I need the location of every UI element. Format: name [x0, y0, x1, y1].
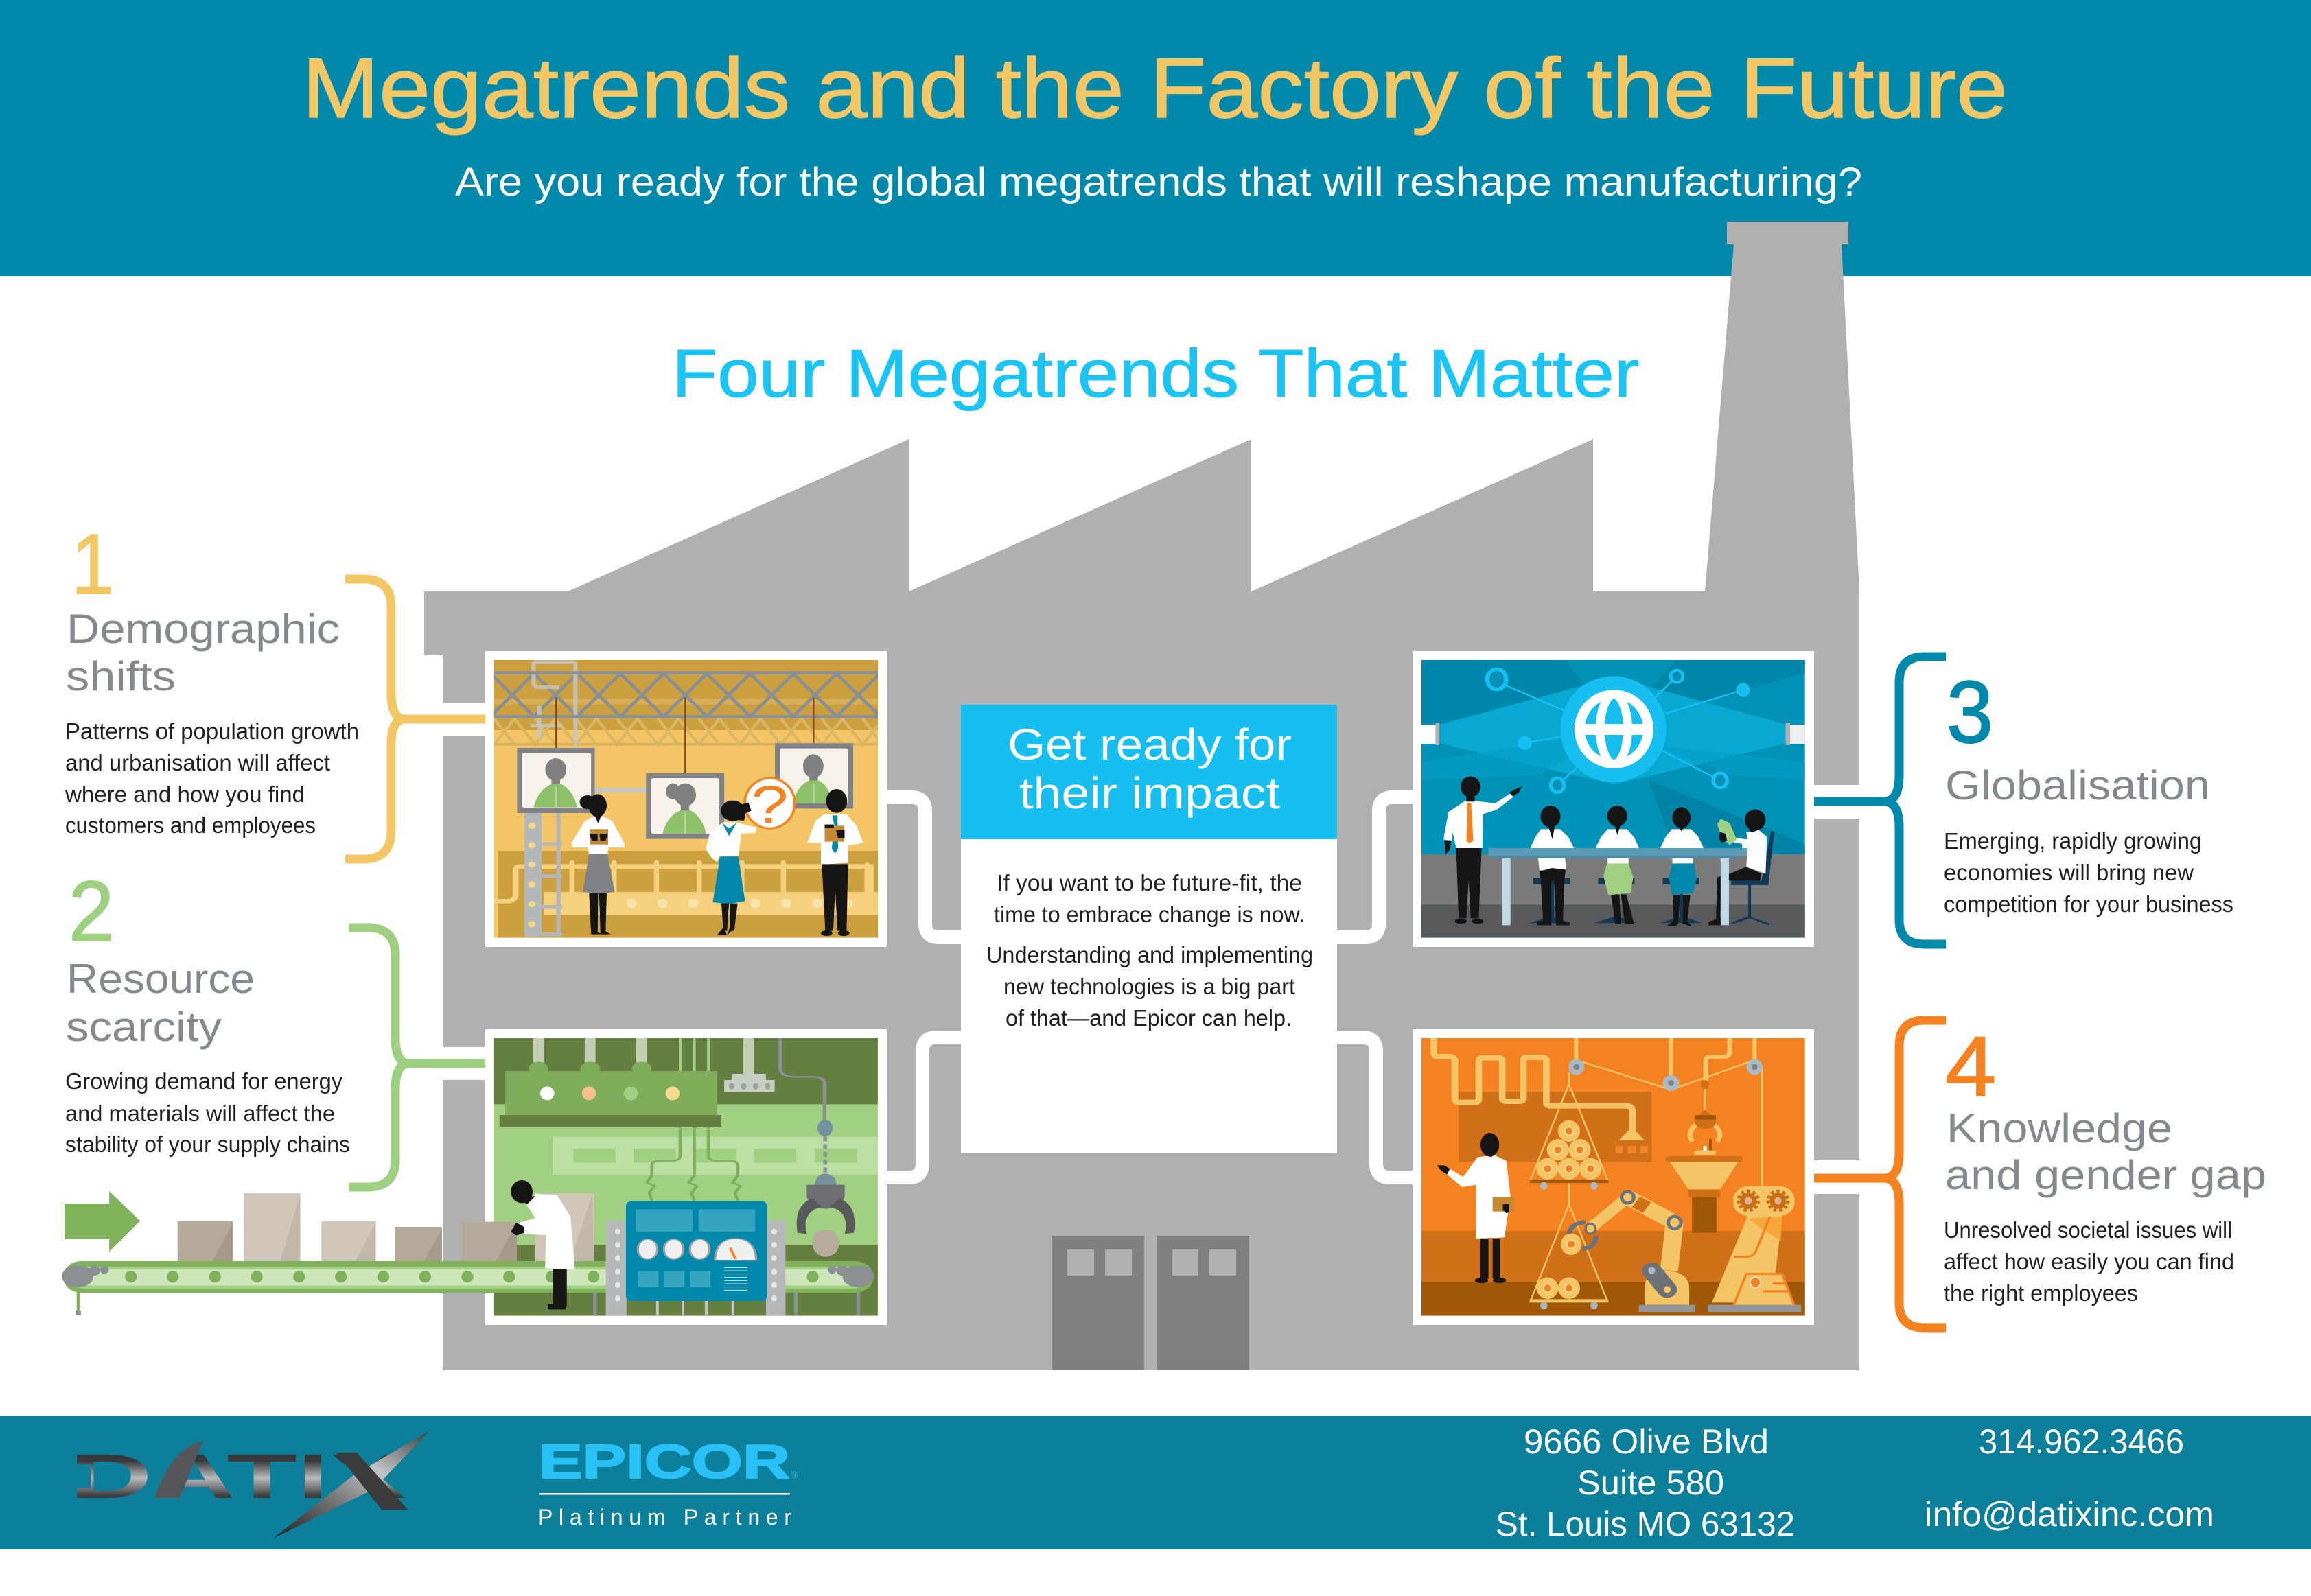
heading demographic shifts: [66, 606, 340, 699]
meeting table: [1489, 848, 1747, 925]
heading knowledge and gender gap: [1945, 1105, 2266, 1198]
body text: and urbanisation will affect: [65, 750, 330, 775]
hood and indicator squares: [1616, 1130, 1648, 1153]
overhead cables: [1569, 1038, 1762, 1204]
robot arm: [1561, 1192, 1695, 1312]
box heading: [1008, 720, 1292, 818]
logo: Epicor: EPICOR: [539, 1435, 790, 1488]
bracket 4: [1814, 1020, 1946, 1328]
wires with lightning: [647, 1127, 741, 1201]
image frame 4: [1413, 1029, 1814, 1325]
box body text: [986, 870, 1313, 1031]
heading resource scarcity: Resource: [67, 956, 255, 1002]
person: pointing scientist: [1437, 1133, 1514, 1283]
pulleys: [1568, 1059, 1763, 1091]
screen 1: [517, 748, 595, 813]
light panel: [553, 1137, 878, 1175]
gear robot: [1708, 1186, 1801, 1312]
panel: trend 2 resource text: [65, 865, 350, 1157]
screen 2: [646, 773, 724, 839]
network nodes: [1487, 669, 1749, 793]
number 2: 2: [69, 865, 114, 959]
image frame 2: [485, 1029, 887, 1325]
address: 9666 Olive Blvd: [1524, 1422, 1769, 1461]
box body text: If you want to be future-fit, the: [997, 870, 1302, 895]
panel: trend 1 demographic text: [65, 517, 359, 838]
person: seated centre: [1594, 806, 1639, 924]
contact details: info@datixinc.com: [1925, 1495, 2214, 1534]
body text: Growing demand for energy: [65, 1068, 342, 1094]
contact details: 314.962.3466: [1979, 1422, 2184, 1461]
heading resource scarcity: [66, 956, 255, 1050]
projectors: [1421, 723, 1805, 745]
logo: DATIX: [69, 1431, 430, 1538]
address: Suite 580: [1577, 1464, 1724, 1502]
illustration: globalisation meeting: [1421, 660, 1805, 938]
factory doors: [1052, 1236, 1249, 1370]
person: seated right: [1660, 807, 1704, 927]
factory silhouette: [424, 222, 1859, 1370]
body text: Emerging, rapidly growing: [1944, 828, 2202, 854]
lower roller rack: [1530, 1204, 1608, 1309]
heading globalisation: Globalisation: [1945, 762, 2210, 808]
subtitle: Are you ready for the global megatrends that will reshape manufacturing?: [455, 160, 1862, 204]
boxes: [178, 1193, 594, 1261]
body text: customers and employees: [65, 812, 316, 838]
person: seated with book: [1708, 810, 1774, 925]
logo: Epicor: ®: [791, 1469, 798, 1480]
body text: Patterns of population growth: [65, 718, 359, 744]
bracket 2: [349, 928, 485, 1187]
body text: affect how easily you can find: [1944, 1249, 2234, 1274]
hanging machine: [500, 1071, 721, 1127]
section heading: Four Megatrends That Matter: [672, 336, 1639, 411]
body text: the right employees: [1944, 1280, 2138, 1306]
panel: trend 3 globalisation text: [1944, 664, 2233, 917]
box heading: Get ready for: [1008, 720, 1292, 769]
heading knowledge and gender gap: and gender gap: [1945, 1152, 2266, 1198]
body text: [65, 1068, 350, 1157]
body text: stability of your supply chains: [65, 1131, 350, 1157]
box heading: their impact: [1019, 768, 1280, 818]
nozzle box: [724, 1074, 775, 1092]
upper roller rack: [1530, 1084, 1608, 1190]
white connector pipes: [887, 797, 1413, 1177]
illustration: machine room: [494, 1038, 878, 1316]
body text: competition for your business: [1944, 891, 2233, 917]
illustration: robotics and knowledge: [1421, 1038, 1805, 1316]
funnel machine: [1666, 1110, 1743, 1233]
group: conveyor section: [63, 1180, 874, 1316]
arrow: [65, 1191, 140, 1252]
number 3: 3: [1947, 664, 1993, 762]
person: presenter: [1443, 777, 1522, 924]
body text: Unresolved societal issues will: [1944, 1217, 2232, 1243]
address: [1496, 1422, 1795, 1543]
control panel: [606, 1201, 785, 1316]
panel: get ready box: [961, 705, 1337, 1153]
body text: economies will bring new: [1944, 860, 2194, 885]
robotic claw: [780, 1038, 855, 1257]
box body text: new technologies is a big part: [1003, 974, 1295, 999]
support legs: [595, 1293, 858, 1315]
panel: trend 4 knowledge text: [1944, 1020, 2266, 1306]
header band: [0, 0, 2311, 276]
contact details: [1925, 1422, 2214, 1534]
yellow pipes: [1434, 1038, 1632, 1132]
number 4: 4: [1945, 1020, 1996, 1114]
bracket 3: [1814, 657, 1946, 944]
person: woman with question: [706, 774, 795, 935]
body text: [1944, 828, 2233, 917]
body text: [65, 718, 359, 838]
logo: DATIX: DATIX: [69, 1442, 406, 1512]
logo: Epicor: [538, 1435, 798, 1529]
person: scientist: [511, 1180, 575, 1309]
address: St. Louis MO 63132: [1496, 1505, 1795, 1543]
body text: [1944, 1217, 2234, 1306]
person: seated left: [1530, 806, 1574, 925]
person: man with tablet: [807, 789, 863, 936]
heading demographic shifts: Demographic: [67, 606, 340, 652]
heading resource scarcity: scarcity: [66, 1004, 222, 1050]
title: Megatrends and the Factory of the Future: [302, 41, 2008, 136]
number 1: 1: [71, 517, 114, 612]
body text: and materials will affect the: [65, 1101, 335, 1126]
conveyor belt: [63, 1261, 874, 1315]
logo: Epicor: Platinum Partner: [538, 1505, 791, 1529]
ceiling pipes: [529, 1038, 749, 1075]
person: woman with clipboard: [572, 794, 625, 935]
heading knowledge and gender gap: Knowledge: [1947, 1105, 2172, 1151]
illustration: job candidates on screens: [491, 660, 883, 938]
box body text: Understanding and implementing: [986, 942, 1313, 967]
person: woman with question: ?: [751, 774, 789, 834]
body text: where and how you find: [65, 782, 305, 807]
box body text: of that—and Epicor can help.: [1006, 1005, 1292, 1031]
screen 3: [775, 743, 853, 808]
globe icon: [1560, 676, 1667, 782]
box body text: time to embrace change is now.: [994, 902, 1305, 927]
footer band: [0, 1416, 2311, 1549]
heading demographic shifts: shifts: [66, 653, 176, 699]
image frame 1: [485, 651, 887, 947]
image frame 3: [1413, 651, 1814, 947]
bracket 1: [345, 579, 485, 859]
